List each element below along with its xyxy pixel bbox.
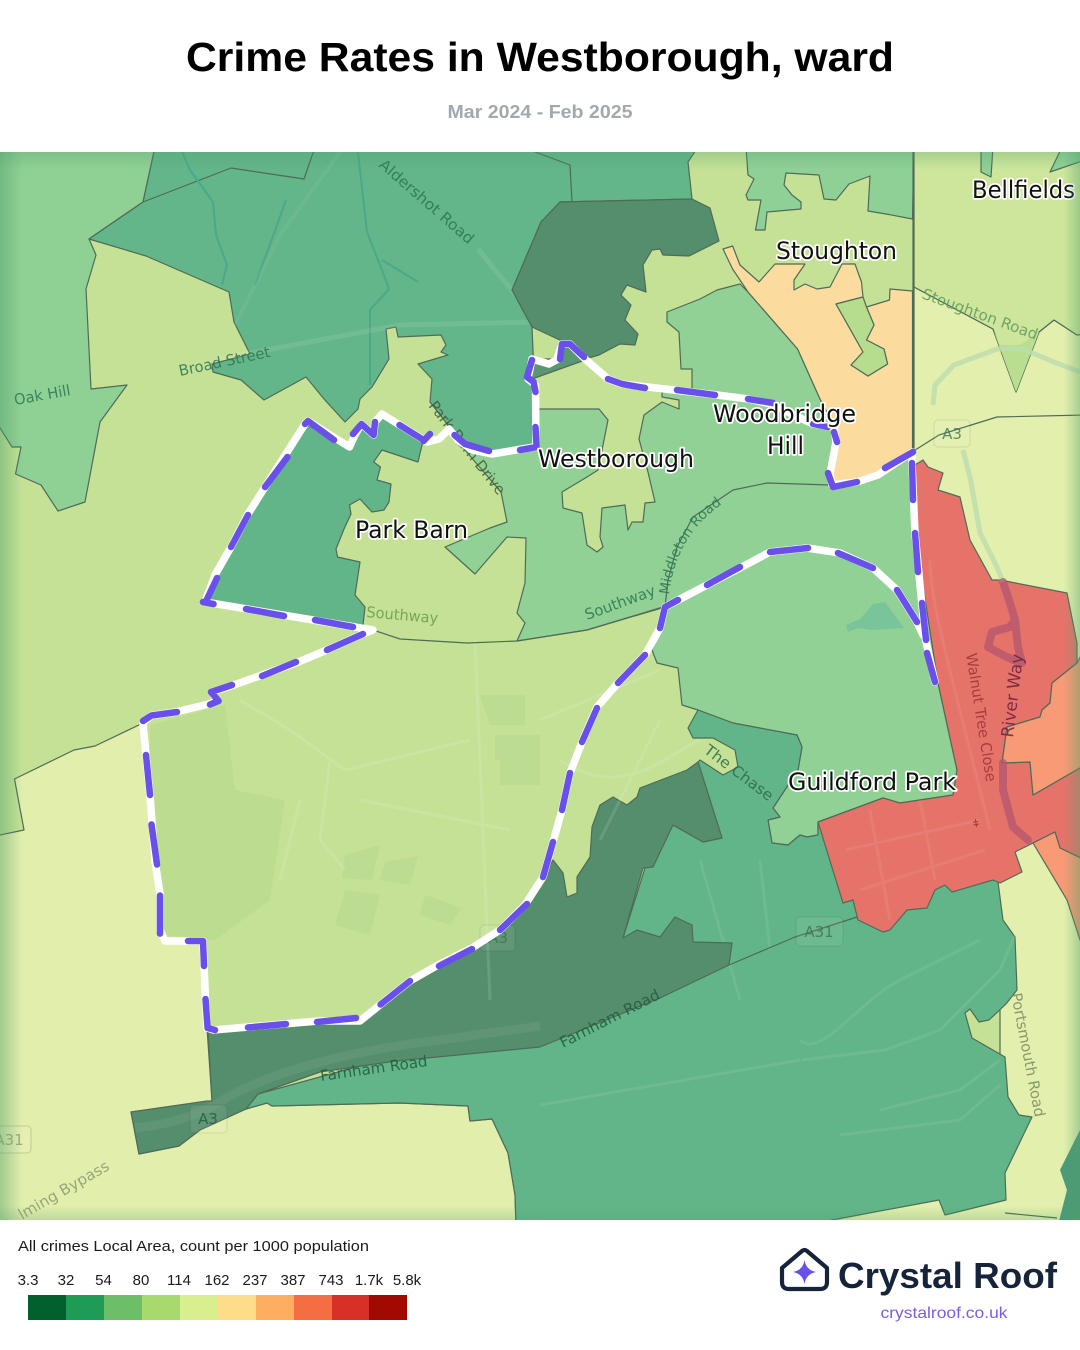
legend values: 162 [204,1272,230,1289]
area: far south-east sliver [1059,1130,1080,1220]
area: dark south polygon [131,762,732,1154]
road shield A31 [796,917,843,946]
legend [18,1238,422,1320]
area: Park Barn west green [205,414,423,625]
legend values: 1.7k [355,1272,384,1289]
brand logo [782,1250,1058,1322]
Stoughton medium inlay [836,297,888,376]
area: southern green [246,710,1032,1225]
area: north-east green patches [980,152,1080,178]
legend values: 114 [167,1272,191,1289]
place label Guildford Park: Guildford Park [788,768,956,796]
area: north-east wedge [993,329,1039,392]
area: east of boundary [914,287,1080,1225]
area: north medium patch [746,147,914,230]
road label Southway east: Southway [582,581,658,624]
Middleton Road and A3 outline [665,415,1080,607]
road shield A3 north [934,420,970,447]
road label Broad Street: Broad Street [177,343,272,380]
area: south-west low tint [0,723,516,1225]
road label Farnham Road west: Farnham Road [319,1052,429,1085]
road shield A31: A31 [804,923,834,941]
road label The Chase: The Chase [700,740,777,805]
legend values: 5.8k [393,1272,422,1289]
place label Woodbridge Hill: Woodbridge [713,400,856,428]
sports pitches in ward [335,695,540,935]
legend colour scale [28,1295,407,1320]
road label Godalming Bypass: lming Bypass [15,1157,112,1223]
icon: house with star [782,1250,827,1289]
vertical ward divider [913,147,1057,1218]
legend values: 387 [280,1272,306,1289]
river upstream [933,349,1080,582]
river Wey over town [988,582,1028,840]
place label Park Barn: Park Barn [355,516,468,544]
place label Westborough: Westborough [538,445,694,473]
road label Southway west: Southway [366,603,439,627]
legend values: 3.3 [18,1272,38,1289]
place label Woodbridge Hill [713,400,856,460]
area: Guildford town red [818,460,1080,932]
title: Crime Rates in Westborough, ward [186,34,894,80]
station symbol: ⧧ [971,815,981,830]
ward streets [240,640,700,1000]
legend values: 743 [318,1272,344,1289]
area: south cream strip [843,1200,1001,1220]
road shield A3 north: A3 [942,425,962,443]
area: north-east [914,147,1080,392]
place label Stoughton: Stoughton [776,237,897,265]
legend title: All crimes Local Area, count per 1000 population [18,1238,369,1255]
area: Westborough and Guildford Park medium band [445,284,957,845]
legend values: 54 [95,1272,112,1289]
place label Bellfields: Bellfields [972,176,1075,204]
ward west shaded field [150,705,285,940]
road label Farnham Road east: Farnham Road [557,986,663,1052]
area: small dark triangle [532,348,582,379]
area: orange south-east [1033,832,1080,955]
dark polygon road bands [135,1026,540,1128]
road label River Way: River Way [998,653,1028,739]
A31 outline [729,917,857,965]
road shield A3 mid: A3 [488,929,508,947]
subtitle: date range: Mar 2024 - Feb 2025 [448,102,632,122]
road label Middleton Road: Middleton Road [659,496,721,594]
woodland paths [213,249,540,360]
ward boundary: Westborough [143,344,935,1030]
place label Woodbridge Hill: Hill [767,432,804,460]
legend values: 80 [133,1272,149,1289]
road label Portsmouth Road: Portsmouth Road [1007,991,1049,1118]
southern green streets [540,860,1015,1135]
road shield A3 south [190,1105,227,1133]
brand name: Crystal Roof [838,1255,1058,1296]
brand url: crystalroof.co.uk [880,1305,1009,1322]
woodland internal outline [143,147,572,202]
area: dark north polygon [512,199,719,359]
boundary white casing [143,344,935,1030]
road label Stoughton Road: Stoughton Road [920,285,1040,343]
area: north woodland [89,147,698,452]
boundary purple dashes [143,344,935,1030]
road shield A3 south: A3 [198,1110,218,1128]
legend values: 237 [242,1272,268,1289]
road shield A31 west [0,1126,31,1153]
choropleth map [0,152,1080,1220]
area: Oak Hill [0,147,155,511]
road label Park Barn Drive: Park Barn Drive [425,397,509,498]
legend values [18,1272,422,1289]
woodland track [234,164,332,326]
Guildford Park pond [846,602,904,632]
road shield A3 mid [480,925,515,951]
road label Walnut Tree Close: Walnut Tree Close [962,652,1000,783]
area: orange east [1002,648,1080,795]
Southway road outline [373,607,663,643]
road label Aldershot Road: Aldershot Road [375,155,478,248]
streams in woodland [182,152,418,385]
map base area [0,152,1080,1220]
legend values: 32 [58,1272,74,1289]
area: Stoughton elevated crime [723,246,912,485]
town streets [845,560,990,920]
road label Oak Hill: Oak Hill [13,381,72,409]
map edge vignette [0,152,1080,1220]
